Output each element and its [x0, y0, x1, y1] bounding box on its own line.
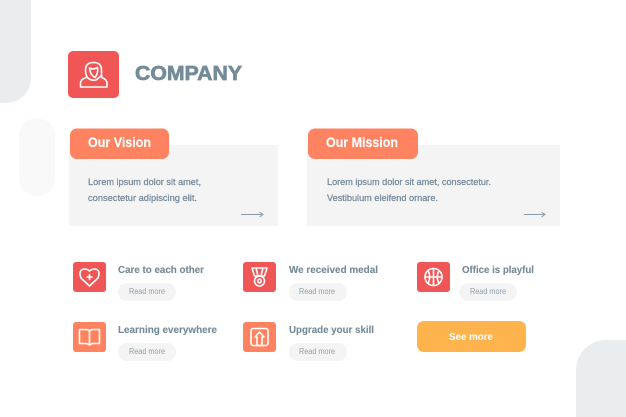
arrow	[524, 212, 545, 217]
item: learning everywhere: Learning everywhere	[118, 325, 217, 336]
arrow	[241, 212, 263, 217]
logo icon	[68, 51, 119, 98]
see more button: See more	[449, 331, 493, 343]
mission text: Vestibulum eleifend ornare.	[327, 193, 438, 203]
icon: basketball	[417, 262, 450, 292]
read more button: Read more	[129, 287, 165, 296]
icon: book	[73, 322, 106, 352]
vision text	[88, 177, 201, 203]
panel: our mission	[307, 128, 560, 226]
read more button: Read more	[299, 347, 335, 356]
read more button: Read more	[129, 347, 165, 356]
heading tab: our mission: Our Mission	[326, 135, 398, 150]
item: office is playful: Office is playful	[462, 265, 534, 276]
item: learning everywhere	[73, 322, 217, 361]
read more button: Read more	[299, 287, 335, 296]
icon: medal	[243, 262, 276, 292]
mission text: Lorem ipsum dolor sit amet, consectetur.	[327, 177, 491, 187]
item: care to each other	[73, 262, 204, 301]
vision text: consectetur adipiscing elit.	[88, 193, 197, 203]
read more button: Read more	[470, 287, 506, 296]
decorative shape: top left	[0, 0, 31, 103]
see more button	[417, 321, 526, 352]
item: office is playful	[417, 262, 534, 301]
title: COMPANY	[135, 63, 243, 85]
icon: upgrade arrow	[243, 322, 276, 352]
heading tab: our vision	[70, 128, 169, 159]
heading tab: our mission	[308, 128, 418, 159]
item: we received medal	[243, 262, 378, 301]
icon: heart	[73, 262, 106, 292]
vision text: Lorem ipsum dolor sit amet,	[88, 177, 201, 187]
heading tab: our vision: Our Vision	[88, 135, 151, 150]
read more button	[118, 343, 176, 361]
decorative shape: left pill	[19, 118, 55, 196]
item: upgrade your skill	[243, 322, 374, 361]
mission text	[327, 177, 491, 203]
item: upgrade your skill: Upgrade your skill	[289, 325, 374, 336]
item: care to each other: Care to each other	[118, 265, 204, 276]
item: we received medal: We received medal	[289, 265, 378, 276]
decorative shape: bottom right	[576, 340, 626, 417]
panel: our vision	[69, 128, 278, 226]
